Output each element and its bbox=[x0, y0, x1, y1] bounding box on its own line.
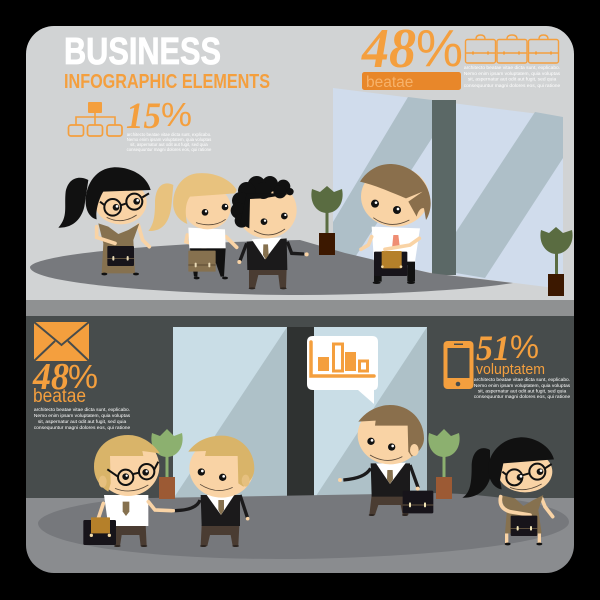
text block: top right description: architecto beatae vitae dicta sunt, explicabo. bbox=[464, 65, 560, 71]
text block: top right description: Nemo enim ipsam voluptatem, quia voluptas bbox=[464, 71, 561, 77]
text block: bottom right description: sit, aspernatur aut odit aut fugit, sed quia bbox=[478, 388, 566, 394]
text block: bottom left description bbox=[34, 407, 131, 431]
panel: top office scene bbox=[26, 26, 574, 301]
icon: envelope bbox=[34, 322, 89, 361]
label bar: beatae bbox=[362, 72, 461, 91]
character: woman with glasses, bottom bbox=[462, 437, 554, 545]
character: woman with glasses, top bbox=[58, 167, 151, 275]
callout: chart speech bubble bbox=[307, 336, 378, 404]
panel: bottom office scene bbox=[26, 316, 574, 574]
stat: 15 percent bbox=[126, 102, 191, 128]
character: blond man in suit, handshake bbox=[172, 436, 254, 547]
label bar: beatae: beatae bbox=[366, 74, 413, 91]
stat: 48 percent top: % bbox=[416, 20, 463, 78]
text block: bottom left description: sit, aspernatur aut odit aut fugit, sed quia bbox=[38, 419, 126, 425]
window: bottom office right bbox=[314, 327, 427, 499]
character: brown-haired man with briefcase bbox=[338, 405, 433, 516]
divider band bbox=[26, 300, 574, 317]
text block: top right description bbox=[464, 65, 561, 89]
icon: top plant left bbox=[311, 186, 343, 255]
window: bottom office left bbox=[173, 327, 287, 499]
text block: 15 percent description: Nemo enim ipsam voluptatem, quia voluptas bbox=[127, 137, 211, 142]
text block: 15 percent description: consequuntur magni dolores eos, qui ratione bbox=[127, 147, 212, 152]
text block: bottom left description: Nemo enim ipsam voluptatem, quia voluptas bbox=[34, 413, 131, 419]
stat: 51 percent bbox=[476, 335, 538, 360]
stat: 15 percent: 15 bbox=[126, 96, 161, 137]
text block: bottom right description: consequuntur magni dolores eos, qui ratione bbox=[474, 394, 571, 400]
character: blond man with glasses, handshake bbox=[83, 435, 172, 547]
icon: three briefcases bbox=[466, 35, 558, 63]
icon: top plant right bbox=[540, 227, 573, 296]
stat: 48 percent bottom: % bbox=[68, 358, 98, 395]
stat: 48 percent top: 48 bbox=[361, 18, 416, 80]
icon: org chart bbox=[68, 102, 122, 136]
text block: 15 percent description bbox=[127, 132, 212, 152]
pillar bbox=[287, 327, 314, 499]
title: BUSINESS bbox=[64, 31, 221, 73]
stat: 15 percent: % bbox=[161, 96, 192, 133]
icon: bottom plant left bbox=[151, 429, 183, 499]
character: curly-haired man bbox=[231, 176, 309, 289]
character: brown-haired man with gold folder bbox=[360, 164, 431, 284]
stat: 51 percent: % bbox=[510, 329, 539, 365]
text block: bottom right description: Nemo enim ipsam voluptatem, quia voluptas bbox=[474, 383, 571, 389]
text block: bottom left description: consequuntur magni dolores eos, qui ratione bbox=[34, 425, 131, 431]
floor ellipse: bottom bbox=[38, 493, 569, 559]
text block: bottom right description: architecto beatae vitae dicta sunt, explicabo. bbox=[474, 377, 570, 383]
icon: smartphone bbox=[444, 341, 474, 389]
label: beatae: beatae bbox=[33, 386, 86, 407]
stat: 48 percent bottom bbox=[32, 364, 97, 390]
text block: 15 percent description: sit, aspernatur aut odit aut fugit, sed quia bbox=[130, 142, 208, 147]
stat: 48 percent bottom: 48 bbox=[32, 356, 69, 398]
text block: top right description: consequuntur magni dolores eos, qui ratione bbox=[464, 83, 561, 89]
stat: 48 percent top bbox=[361, 30, 462, 68]
floor bbox=[26, 498, 574, 574]
icon: bottom plant right bbox=[428, 429, 460, 499]
label: voluptatem: voluptatem bbox=[476, 361, 545, 378]
window: top office bbox=[333, 88, 563, 289]
text block: top right description: sit, aspernatur aut odit aut fugit, sed quia bbox=[468, 76, 556, 82]
text block: bottom left description: architecto beatae vitae dicta sunt, explicabo. bbox=[34, 407, 130, 413]
text block: 15 percent description: architecto beatae vitae dicta sunt, explicabo. bbox=[127, 132, 211, 137]
floor ellipse: top bbox=[30, 240, 513, 295]
character: blonde woman, top bbox=[148, 173, 237, 279]
text block: bottom right description bbox=[474, 377, 571, 400]
subtitle: INFOGRAPHIC ELEMENTS bbox=[64, 71, 270, 93]
stat: 51 percent: 51 bbox=[476, 328, 510, 368]
